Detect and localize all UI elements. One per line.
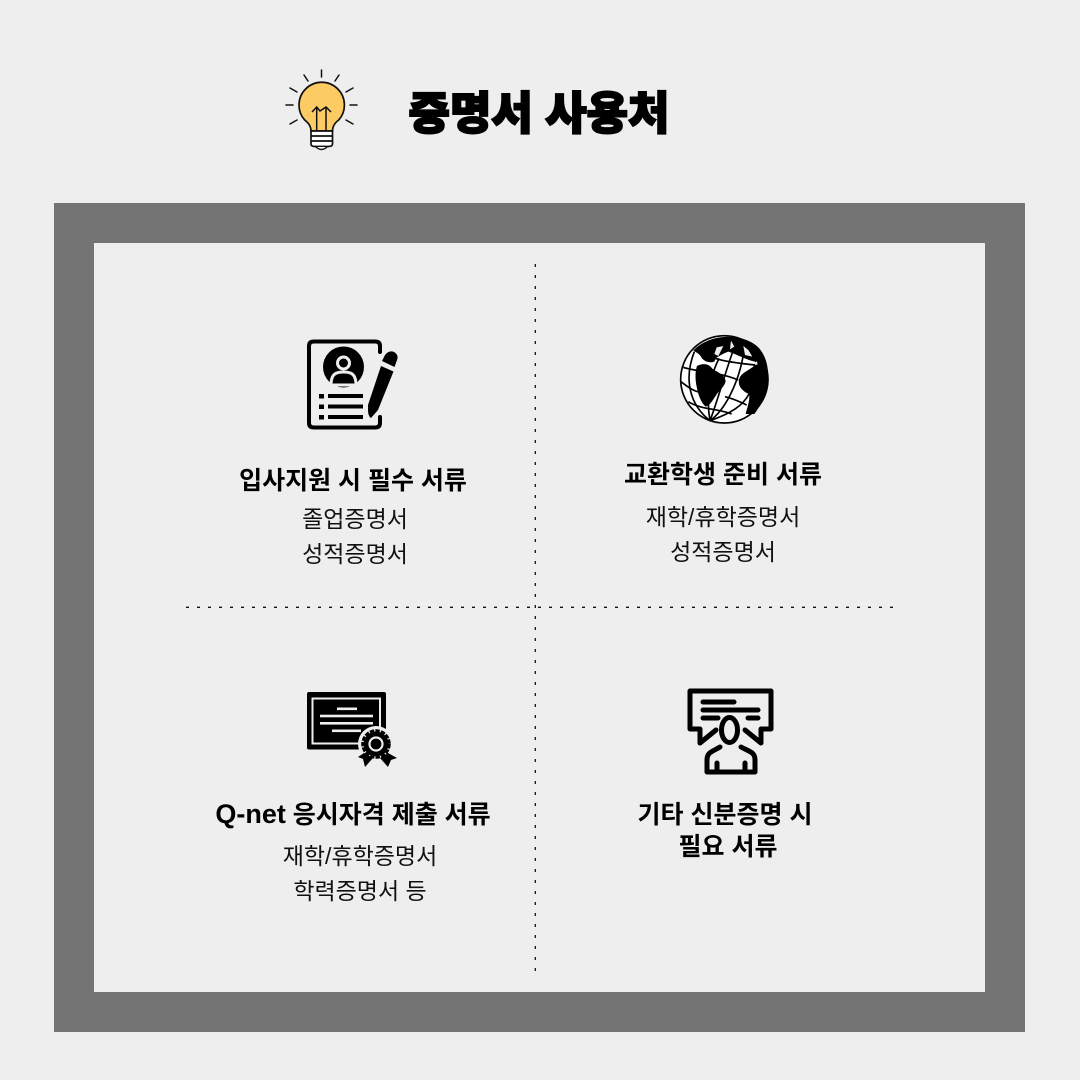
frame panel: [54, 203, 1025, 1032]
text: Q-net documents: [283, 843, 437, 904]
heading: Q-net: Q-net 응시자격 제출 서류: [215, 799, 491, 829]
heading: identity verification: 기타 신분증명 시: [638, 801, 812, 829]
heading: exchange student: 교환학생 준비 서류: [624, 461, 822, 489]
heading: identity verification: [638, 801, 812, 861]
heading: job application: 입사지원 시 필수 서류: [239, 467, 467, 495]
text: exchange student documents: 성적증명서: [670, 539, 776, 565]
text: Q-net documents: 재학/휴학증명서: [283, 843, 437, 869]
text: job application documents: [302, 506, 408, 567]
text: exchange student documents: 재학/휴학증명서: [646, 504, 800, 530]
text: job application documents: 성적증명서: [302, 541, 408, 567]
text: Q-net documents: 학력증명서 등: [293, 878, 427, 904]
text: job application documents: 졸업증명서: [302, 506, 408, 532]
heading: identity verification: 필요 서류: [679, 833, 777, 861]
text: exchange student documents: [646, 504, 800, 565]
title: 증명서 사용처: [409, 88, 669, 139]
